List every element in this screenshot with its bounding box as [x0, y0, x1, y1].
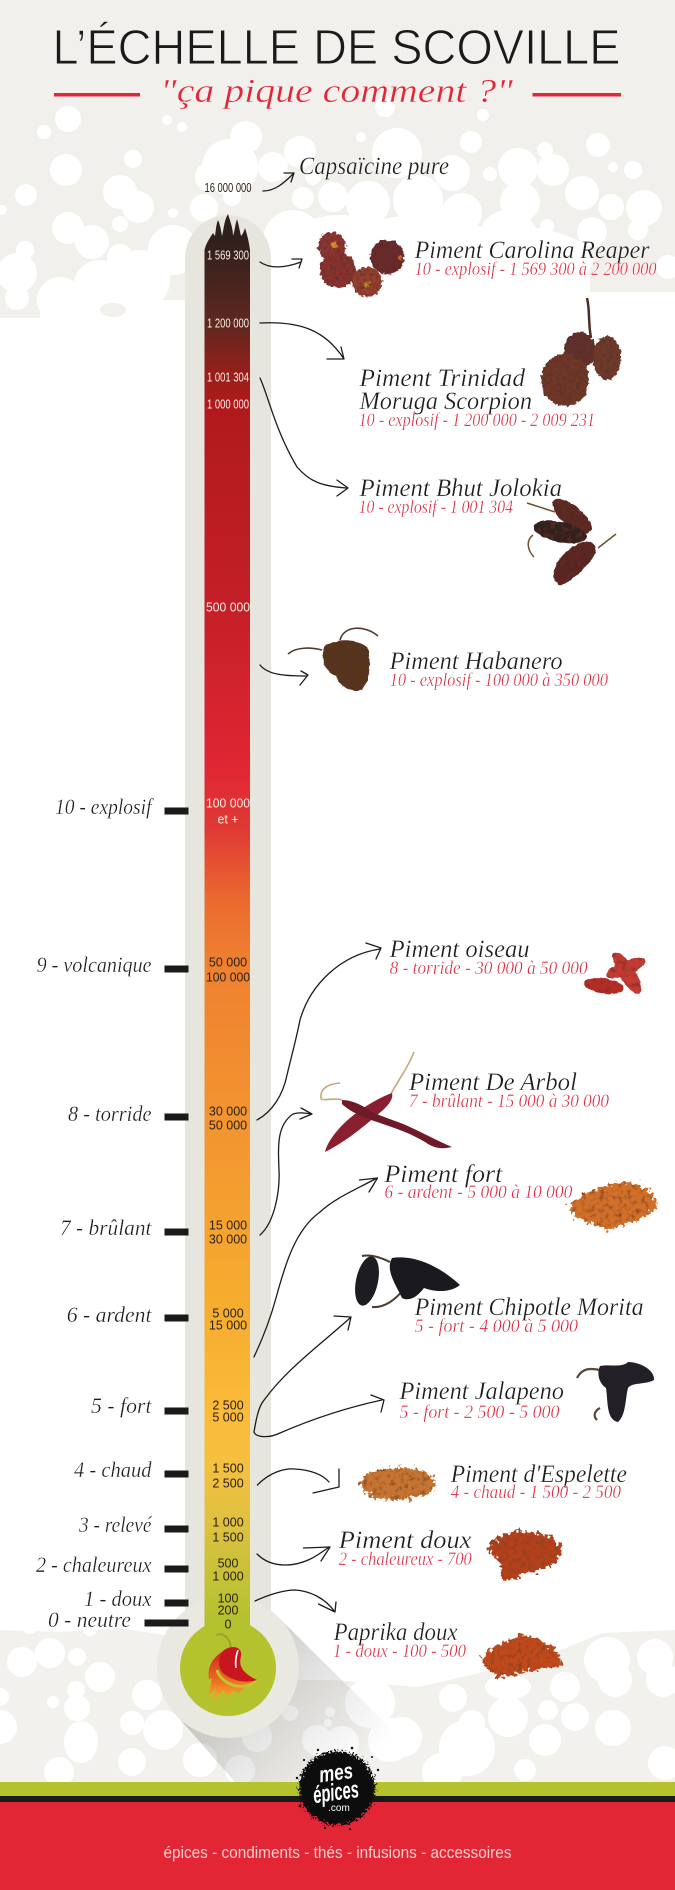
- arrow: capsaïcine: [263, 173, 294, 191]
- photo: [288, 628, 378, 690]
- photo: [360, 1468, 436, 1500]
- scoville values: 500: [218, 1556, 238, 1570]
- name: Piment Habanero: [389, 648, 563, 675]
- photo: [527, 493, 616, 585]
- arrow: [260, 323, 344, 359]
- photo: [541, 298, 621, 406]
- photo: [583, 948, 648, 998]
- detail: 10 - explosif - 100 000 à 350 000: [390, 670, 608, 691]
- tube casing: [185, 215, 271, 1640]
- detail: 2 - chaleureux - 700: [339, 1549, 472, 1570]
- scoville values: 500 000: [206, 600, 250, 614]
- item: Piment doux: [257, 1527, 561, 1582]
- item: Espelette: [257, 1461, 627, 1503]
- scale labels: 3 - relevé: [78, 1512, 153, 1537]
- scale labels: 4 - chaud: [74, 1457, 152, 1482]
- arrow: [260, 665, 308, 685]
- scale labels: 8 - torride: [68, 1101, 152, 1126]
- name: Piment doux: [338, 1527, 471, 1554]
- item: Habanero: [260, 628, 608, 691]
- bulb casing: [157, 1596, 299, 1738]
- scale labels: 7 - brûlant: [60, 1215, 152, 1240]
- arrow: [257, 1469, 339, 1493]
- photo: [489, 1532, 561, 1582]
- detail: 1 - doux - 100 - 500: [333, 1641, 466, 1662]
- scoville values: 15 000: [209, 1318, 247, 1332]
- photo: [482, 1636, 563, 1678]
- scoville values: 2 500: [212, 1398, 244, 1412]
- logo: mes épices .com: épices: [311, 1776, 361, 1809]
- logo: mes épices .com: [296, 1747, 380, 1830]
- scale ticks: [144, 808, 188, 1626]
- scoville values: 1 000: [212, 1516, 244, 1530]
- scoville values: 15 000: [209, 1218, 247, 1232]
- name: Piment Jalapeno: [399, 1378, 564, 1405]
- icon: chili pepper in flames: [208, 1634, 257, 1700]
- bulb shadow: [178, 1617, 445, 1782]
- scoville values: 100 000: [206, 796, 250, 810]
- detail: 4 - chaud - 1 500 - 2 500: [451, 1482, 621, 1503]
- name: Piment oiseau: [389, 936, 530, 963]
- arrow: [260, 378, 348, 496]
- thermometer: [157, 181, 445, 1782]
- scale labels: [36, 794, 154, 1632]
- arrow: [254, 1395, 384, 1437]
- scoville values: et +: [218, 812, 238, 826]
- detail: 10 - explosif - 1 001 304: [359, 497, 513, 518]
- scoville values: 1 500: [212, 1462, 244, 1476]
- item: Chipotle Morita: [254, 1254, 644, 1432]
- name: [358, 365, 532, 415]
- scoville values: 5 000: [212, 1410, 244, 1424]
- scoville values: 200: [218, 1604, 238, 1618]
- scoville values: 0: [225, 1618, 232, 1632]
- scale labels: 6 - ardent: [67, 1302, 152, 1327]
- scoville values: [204, 181, 252, 1632]
- detail: 5 - fort - 2 500 - 5 000: [400, 1402, 560, 1423]
- arrow: [260, 259, 302, 268]
- scoville values: 1 000 000: [207, 398, 249, 412]
- scoville values: 30 000: [209, 1104, 247, 1118]
- item: Trinidad Moruga Scorpion: [260, 298, 621, 431]
- name: Piment Trinidad: [358, 365, 525, 392]
- scoville values: 50 000: [209, 956, 247, 970]
- arrow: [257, 1547, 330, 1565]
- scale labels: 5 - fort: [91, 1393, 152, 1418]
- detail: 6 - ardent - 5 000 à 10 000: [384, 1182, 573, 1203]
- photo: [568, 1183, 656, 1231]
- arrow: [260, 1108, 312, 1235]
- name: Piment De Arbol: [408, 1069, 577, 1096]
- item: Bhut Jolokia: [260, 378, 616, 585]
- name: Piment Bhut Jolokia: [359, 475, 562, 502]
- logo: mes épices .com: .com: [328, 1803, 350, 1814]
- scoville values: 1 000: [212, 1570, 244, 1584]
- detail: 10 - explosif - 1 200 000 - 2 009 231: [359, 410, 595, 431]
- bulb fill: [180, 1620, 276, 1716]
- item: De Arbol: [260, 1052, 609, 1235]
- label: capsaïcine pure: Capsaïcine pure: [299, 153, 449, 180]
- detail: 7 - brûlant - 15 000 à 30 000: [409, 1091, 609, 1112]
- mercury column: [204, 214, 250, 1640]
- scale labels: 2 - chaleureux: [36, 1552, 152, 1577]
- item: Jalapeno: [254, 1362, 654, 1437]
- scale labels: 9 - volcanique: [37, 952, 152, 977]
- scoville values: 50 000: [209, 1118, 247, 1132]
- scoville values: 1 569 300: [207, 248, 249, 262]
- logo: mes épices .com: mes: [317, 1758, 355, 1787]
- background: top speckled band: [0, 0, 675, 323]
- item: Paprika doux: [255, 1590, 563, 1678]
- name: Piment fort: [383, 1161, 503, 1188]
- arrow: [255, 1590, 336, 1612]
- scoville values: 30 000: [209, 1232, 247, 1246]
- name: Piment Chipotle Morita: [414, 1294, 644, 1321]
- detail: 8 - torride - 30 000 à 50 000: [390, 958, 588, 979]
- photo: [351, 1254, 460, 1308]
- arrow: [254, 1316, 351, 1432]
- scoville values: 100 000: [206, 970, 250, 984]
- item: Piment fort: [254, 1161, 656, 1357]
- arrow: [257, 943, 381, 1120]
- detail: 5 - fort - 4 000 à 5 000: [415, 1316, 578, 1337]
- scoville values: 1 200 000: [207, 316, 249, 330]
- name: Moruga Scorpion: [359, 388, 532, 415]
- scale labels: 1 - doux: [84, 1586, 152, 1611]
- photo: [577, 1362, 654, 1422]
- scale labels: 0 - neutre: [48, 1607, 131, 1632]
- item: Carolina Reaper: [260, 232, 657, 297]
- scoville values: 5 000: [212, 1306, 244, 1320]
- photo: [321, 1052, 452, 1152]
- scoville values: 100: [218, 1592, 238, 1606]
- scoville values: 1 500: [212, 1530, 244, 1544]
- name: Piment d'Espelette: [450, 1461, 627, 1488]
- item: Piment oiseau: [257, 936, 648, 1120]
- footer tagline: épices - condiments - thés - infusions - accessoires: [164, 1843, 512, 1862]
- photo: [318, 232, 404, 297]
- name: Piment Carolina Reaper: [414, 237, 650, 264]
- footer band: [0, 1782, 675, 1890]
- scoville values: 16 000 000: [204, 181, 252, 195]
- background: bottom speckled band: [0, 1616, 675, 1793]
- scale labels: 10 - explosif: [55, 794, 154, 819]
- scoville values: 1 001 304: [207, 370, 249, 384]
- scoville values: 2 500: [212, 1476, 244, 1490]
- subtitle with rules: "ça pique comment ?": [160, 73, 514, 110]
- arrow: [254, 1178, 378, 1357]
- name: Paprika doux: [333, 1619, 458, 1646]
- title: L’ÉCHELLE DE SCOVILLE: [52, 21, 620, 75]
- subtitle with rules: [54, 73, 621, 110]
